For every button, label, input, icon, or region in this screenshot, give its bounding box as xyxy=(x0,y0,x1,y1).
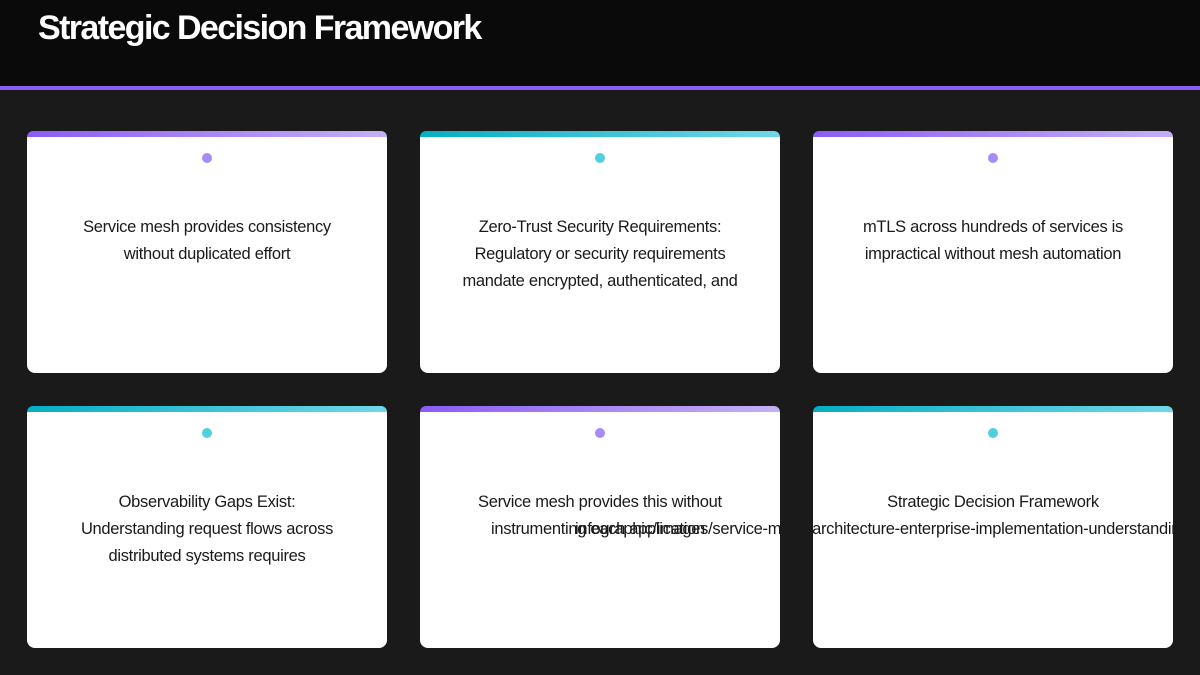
text: Strategic Decision Framework xyxy=(887,493,1099,511)
text xyxy=(863,218,1123,263)
card 2 xyxy=(420,131,780,373)
text: mTLS across hundreds of services is xyxy=(863,218,1123,236)
card 5 xyxy=(420,406,780,648)
icon: dot xyxy=(988,153,998,163)
icon: dot xyxy=(202,153,212,163)
text xyxy=(81,493,333,565)
icon: dot xyxy=(595,153,605,163)
text xyxy=(83,218,332,263)
card 3 xyxy=(813,131,1173,373)
text: Regulatory or security requirements xyxy=(475,245,725,263)
card 1 xyxy=(27,131,387,373)
text: mandate encrypted, authenticated, and xyxy=(462,272,738,290)
overlapping text line: instrumenting each application xyxy=(491,520,705,538)
card 6 xyxy=(813,406,1173,648)
text: Service mesh provides this without xyxy=(478,493,722,511)
text: Zero-Trust Security Requirements: xyxy=(479,218,721,236)
text: distributed systems requires xyxy=(108,547,306,565)
text: Observability Gaps Exist: xyxy=(119,493,295,511)
card 4 xyxy=(27,406,387,648)
icon: dot xyxy=(595,428,605,438)
text: without duplicated effort xyxy=(124,245,290,263)
overflow url text: infographic/images/service-mesh-architecture-enterprise-implementation-understanding xyxy=(575,520,1189,538)
icon: dot xyxy=(202,428,212,438)
icon: dot xyxy=(988,428,998,438)
text: impractical without mesh automation xyxy=(865,245,1121,263)
text: Service mesh provides consistency xyxy=(83,218,331,236)
text: Understanding request flows across xyxy=(81,520,333,538)
title: Strategic Decision Framework xyxy=(38,9,481,47)
header xyxy=(0,0,1200,86)
text xyxy=(462,218,738,290)
